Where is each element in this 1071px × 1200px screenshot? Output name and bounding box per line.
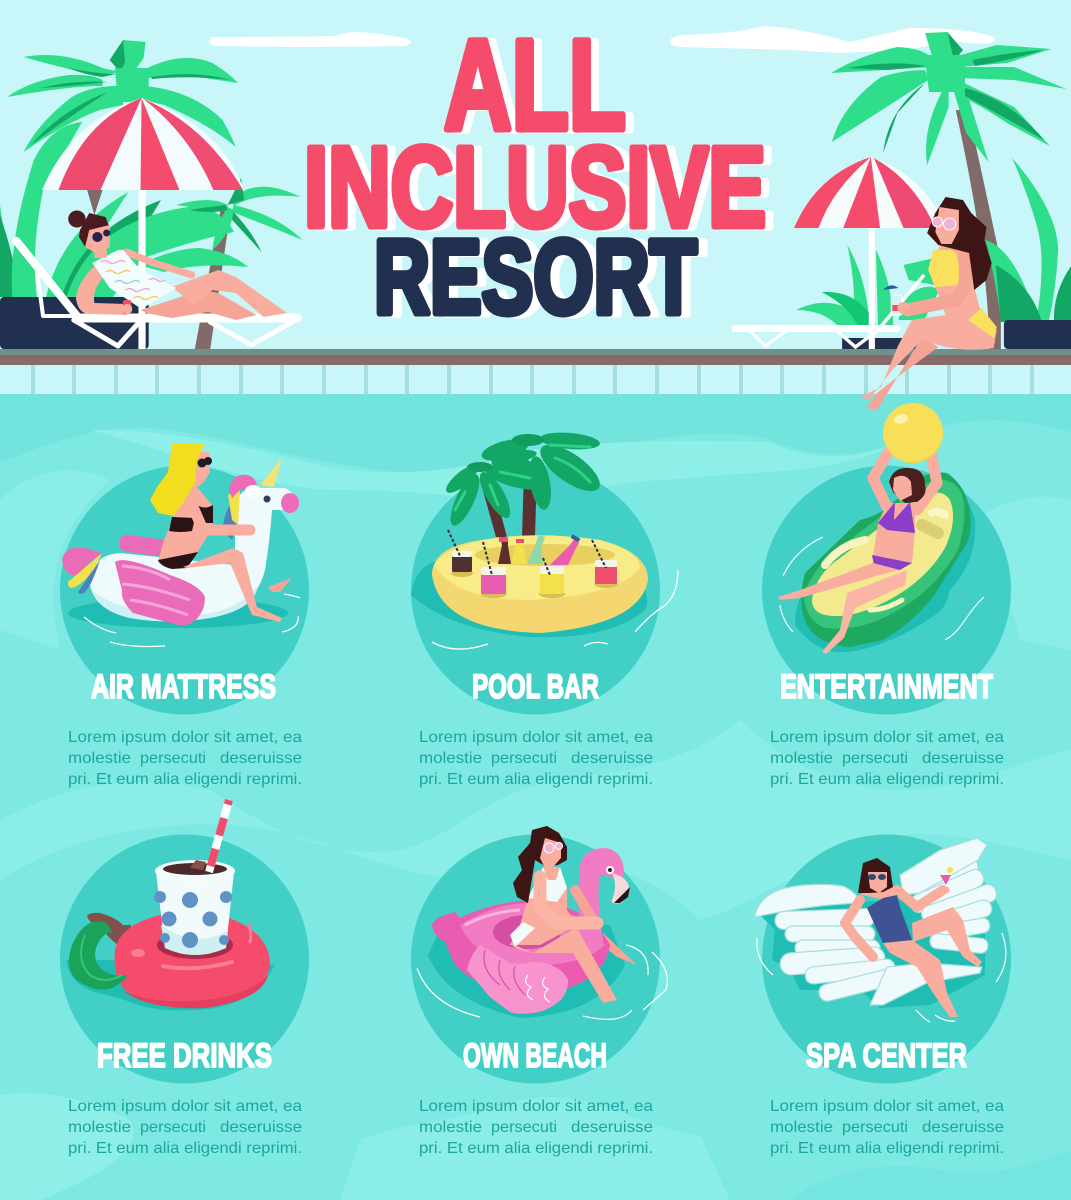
right palm tree and plants [796, 32, 1071, 349]
panel: pool bar [411, 430, 678, 788]
description: molestie [419, 1119, 482, 1136]
heading: OWN BEACH [463, 1037, 607, 1075]
title [304, 14, 774, 337]
icon: avocado float with woman and ball [778, 403, 984, 654]
clouds [209, 26, 995, 53]
description: Lorem ipsum dolor sit amet, ea [419, 1098, 653, 1115]
background: sky [0, 0, 1071, 395]
left sunbathing woman [68, 210, 287, 320]
icon: apple float with drink [66, 800, 275, 1010]
panel: free drinks [60, 800, 309, 1157]
description: pri. Et eum alia eligendi reprimi. [770, 1140, 1004, 1157]
small palm crown [176, 178, 303, 252]
circle [411, 466, 660, 714]
description: persecuti [140, 750, 206, 767]
heading: AIR MATTRESS [91, 668, 276, 706]
heading: ENTERTAINMENT [780, 668, 993, 706]
description: pri. Et eum alia eligendi reprimi. [68, 1140, 302, 1157]
icon: wings float with woman [755, 838, 1006, 1022]
left umbrella [42, 98, 244, 350]
description: persecuti [491, 1119, 557, 1136]
description: Lorem ipsum dolor sit amet, ea [770, 1098, 1004, 1115]
circle [60, 466, 309, 714]
description: Lorem ipsum dolor sit amet, ea [770, 729, 1004, 746]
pool wall tiles [31, 365, 1034, 394]
description: persecuti [491, 750, 557, 767]
left white lounger [16, 241, 297, 346]
description: pri. Et eum alia eligendi reprimi. [419, 1140, 653, 1157]
description: molestie [770, 750, 833, 767]
title line: RESORT: RESORT [383, 220, 706, 337]
description: deseruisse [922, 750, 1004, 767]
right scene backdrop [732, 32, 1071, 349]
description: molestie [419, 750, 482, 767]
description: molestie [770, 1119, 833, 1136]
panel: spa center [755, 834, 1011, 1157]
left sun lounger cushion [0, 297, 149, 349]
title line: ALL: ALL [452, 15, 634, 158]
description: pri. Et eum alia eligendi reprimi. [419, 771, 653, 788]
background: pool water [0, 394, 1071, 1200]
title line: ALL: ALL [444, 14, 626, 157]
panel: air mattress [60, 443, 309, 788]
description: deseruisse [571, 1119, 653, 1136]
heading: FREE DRINKS [97, 1037, 272, 1075]
heading: SPA CENTER [806, 1037, 967, 1075]
description: Lorem ipsum dolor sit amet, ea [419, 729, 653, 746]
description: deseruisse [220, 750, 302, 767]
heading: POOL BAR [472, 668, 599, 706]
right sun lounger [732, 275, 1071, 349]
panel: entertainment [762, 403, 1011, 788]
right umbrella [794, 157, 947, 349]
title line: INCLUSIVE: INCLUSIVE [304, 124, 766, 250]
circle [762, 834, 1011, 1084]
description: deseruisse [220, 1119, 302, 1136]
circle [60, 834, 309, 1084]
description: pri. Et eum alia eligendi reprimi. [770, 771, 1004, 788]
description: persecuti [842, 1119, 908, 1136]
description: persecuti [140, 1119, 206, 1136]
right woman sitting on the pool edge [861, 197, 997, 410]
title line: INCLUSIVE: INCLUSIVE [312, 125, 774, 251]
icon: unicorn float with woman [62, 443, 300, 646]
description: deseruisse [571, 750, 653, 767]
title line: RESORT: RESORT [374, 219, 697, 336]
left palm trees and plants [0, 40, 303, 349]
description: persecuti [842, 750, 908, 767]
description: Lorem ipsum dolor sit amet, ea [68, 729, 302, 746]
description: Lorem ipsum dolor sit amet, ea [68, 1098, 302, 1115]
icon: flamingo float with woman [417, 826, 667, 1019]
description: pri. Et eum alia eligendi reprimi. [68, 771, 302, 788]
circle [762, 466, 1011, 714]
icon: island pool bar [411, 430, 678, 649]
left scene backdrop [0, 40, 303, 350]
pool deck [0, 349, 1071, 365]
panel: own beach [411, 826, 667, 1157]
description: molestie [68, 750, 131, 767]
description: deseruisse [922, 1119, 1004, 1136]
circle [411, 834, 660, 1084]
large palm crown [7, 40, 238, 152]
description: molestie [68, 1119, 131, 1136]
